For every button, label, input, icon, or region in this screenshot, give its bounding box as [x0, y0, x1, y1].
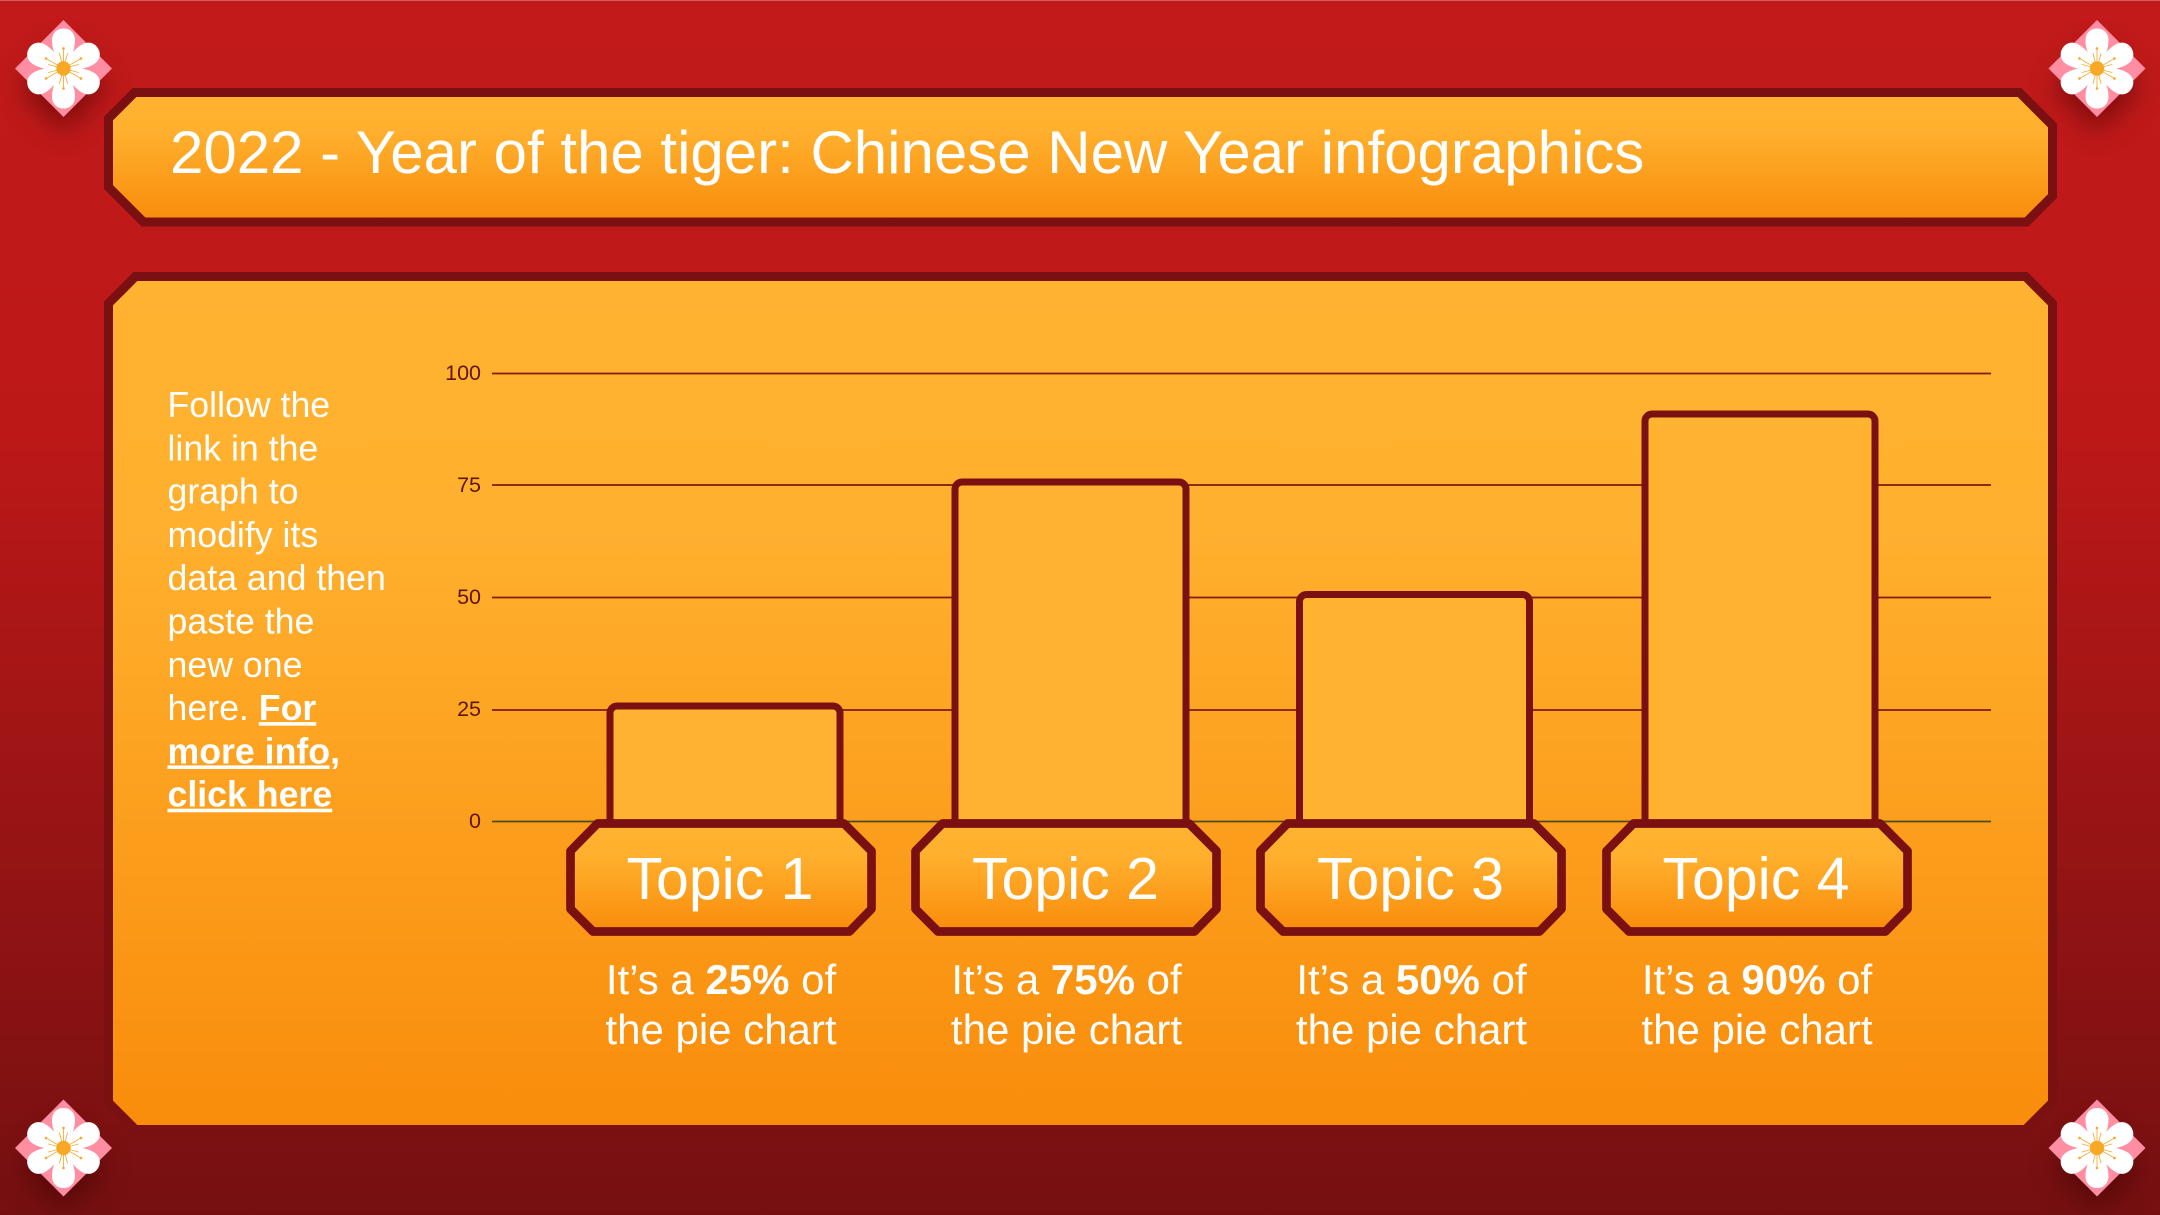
- icon: flower bottom left: [15, 1100, 112, 1196]
- topic 1 card: the pie chart: [605, 1006, 837, 1053]
- topic 3 card: the pie chart: [1296, 1006, 1527, 1053]
- bar chart: [445, 361, 1991, 836]
- side text block: more info,: [168, 731, 340, 771]
- axis labels: 0: [469, 809, 481, 833]
- topic 2 card: Topic 2: [972, 846, 1159, 912]
- topic 1 card: Topic 1: [627, 846, 813, 912]
- bar: topic 3: [1300, 594, 1530, 836]
- topic 4 card: Topic 4: [1663, 846, 1849, 912]
- main panel: [108, 276, 2052, 1130]
- topic 4 card: the pie chart: [1641, 1006, 1873, 1053]
- bar: topic 1: [610, 706, 840, 836]
- topic 1 card: It’s a 25% of: [606, 956, 837, 1003]
- title banner: [108, 92, 2052, 222]
- axis labels: [445, 361, 481, 833]
- side text block: here. For: [168, 688, 316, 728]
- topic 2 card: It’s a 75% of: [951, 956, 1182, 1003]
- side text block: graph to: [168, 472, 298, 512]
- icon: flower bottom right: [2048, 1100, 2146, 1196]
- flower shadow: top right: [2053, 44, 2141, 132]
- axis labels: 25: [457, 697, 481, 721]
- topic 4 card: It’s a 90% of: [1642, 956, 1873, 1003]
- side text block: paste the: [168, 602, 314, 642]
- flower shadow: bottom left: [20, 1124, 108, 1212]
- flower shadow: top left: [20, 44, 108, 132]
- topic 3 card: [1260, 824, 1562, 1053]
- topic 1 card: [570, 824, 872, 1053]
- axis labels: 50: [457, 585, 481, 609]
- side text block: link in the: [168, 428, 318, 468]
- axis labels: 75: [457, 473, 481, 497]
- title: 2022 - Year of the tiger: Chinese New Year infographics: [170, 119, 1644, 186]
- topic 2 card: [916, 824, 1216, 1053]
- topic 3 card: Topic 3: [1317, 846, 1504, 912]
- side text block: data and then: [168, 558, 386, 598]
- topic 3 card: It’s a 50% of: [1296, 956, 1527, 1003]
- topic 2 card: the pie chart: [951, 1006, 1182, 1053]
- icon: flower top left: [15, 20, 112, 117]
- flower shadow: bottom right: [2053, 1124, 2141, 1212]
- bar: topic 4: [1645, 414, 1875, 836]
- bar: topic 2: [955, 482, 1186, 836]
- icon: flower top right: [2048, 20, 2146, 117]
- side text block: new one: [168, 645, 302, 685]
- side text block: modify its: [168, 515, 318, 555]
- side text block: click here: [168, 775, 332, 815]
- topic 4 card: [1606, 824, 1908, 1053]
- side text block: Follow the: [168, 385, 330, 425]
- axis labels: 100: [445, 361, 481, 385]
